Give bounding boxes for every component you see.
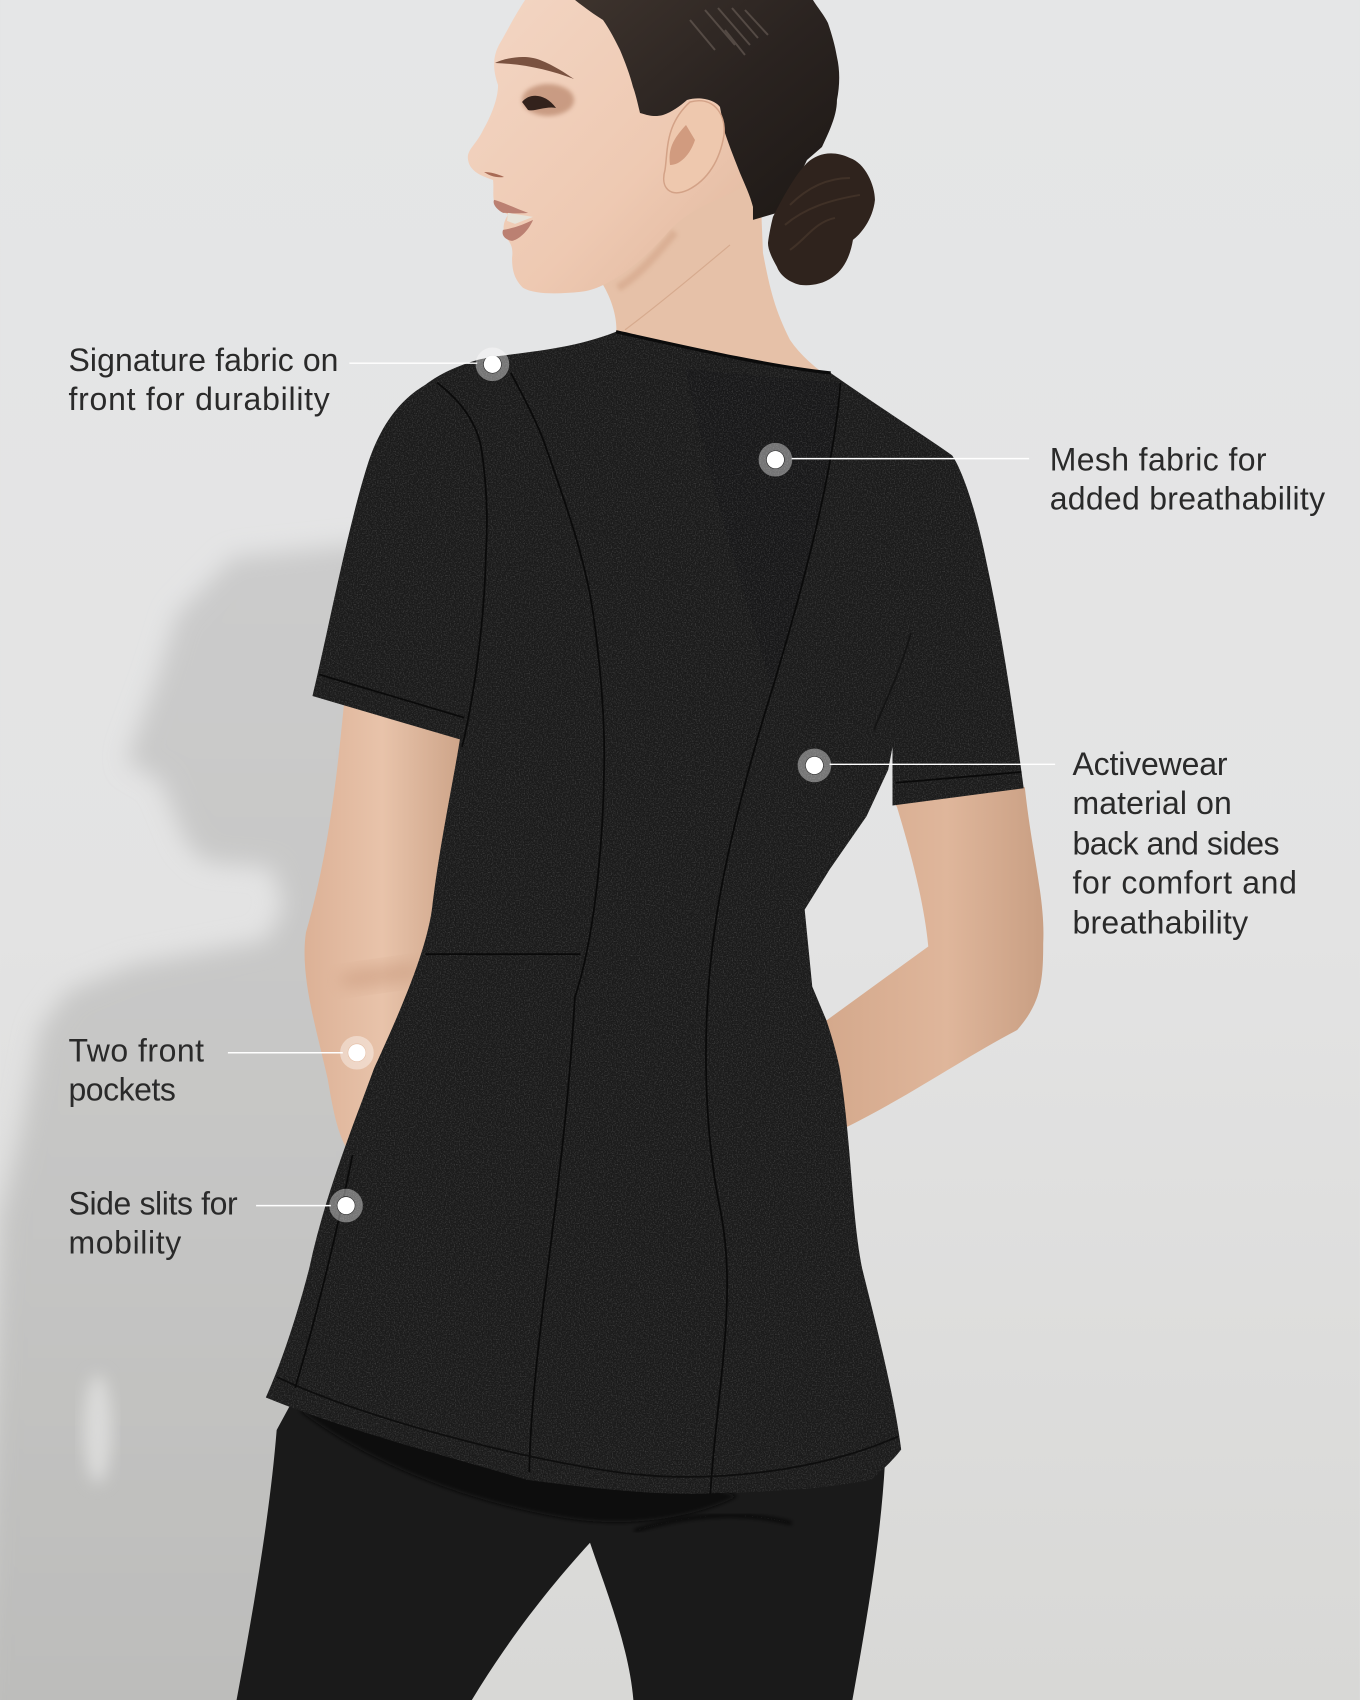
neck	[600, 180, 835, 382]
callout: side slits	[69, 1185, 359, 1260]
callout: signature fabric	[69, 342, 505, 417]
hair highlights	[690, 8, 768, 55]
callout: activewear material: for comfort and	[1072, 864, 1297, 900]
cast shadow of the model	[0, 544, 369, 1700]
callout: activewear material: back and sides	[1072, 825, 1280, 861]
callout: two front pockets	[69, 1032, 370, 1107]
model: arms	[305, 694, 1043, 1158]
callout: activewear material: breathability	[1072, 904, 1248, 940]
jaw shadow	[618, 232, 675, 288]
ear	[664, 101, 724, 193]
callout: activewear material: material on	[1072, 785, 1232, 821]
callout: activewear material	[801, 746, 1297, 940]
eye	[522, 84, 574, 116]
mesh panel	[685, 369, 840, 690]
callout: mesh fabric: added breathability	[1050, 481, 1325, 517]
eyebrow	[495, 57, 574, 79]
hair	[575, 0, 839, 220]
callout: two front pockets: pockets	[69, 1071, 176, 1107]
model: neck and head	[468, 0, 875, 382]
callout: side slits: Side slits for	[69, 1185, 238, 1221]
callout: mesh fabric: Mesh fabric for	[1050, 442, 1267, 478]
left arm	[305, 694, 477, 1158]
model: trousers	[237, 1404, 885, 1700]
callout: signature fabric: Signature fabric on	[69, 342, 338, 378]
callout: signature fabric: front for durability	[69, 381, 330, 417]
shirt body	[266, 332, 1024, 1494]
callout: mesh fabric	[762, 442, 1325, 517]
bun	[768, 153, 875, 285]
callout: side slits: mobility	[69, 1224, 181, 1260]
face	[468, 0, 750, 293]
right arm	[803, 787, 1043, 1128]
lips	[494, 200, 533, 241]
nostril	[484, 172, 504, 177]
seams	[277, 373, 1022, 1494]
fabric texture	[266, 332, 1024, 1494]
neck binding	[616, 332, 831, 373]
callout: two front pockets: Two front	[69, 1032, 204, 1068]
scrub top	[266, 332, 1024, 1494]
callout: activewear material: Activewear	[1072, 746, 1228, 782]
